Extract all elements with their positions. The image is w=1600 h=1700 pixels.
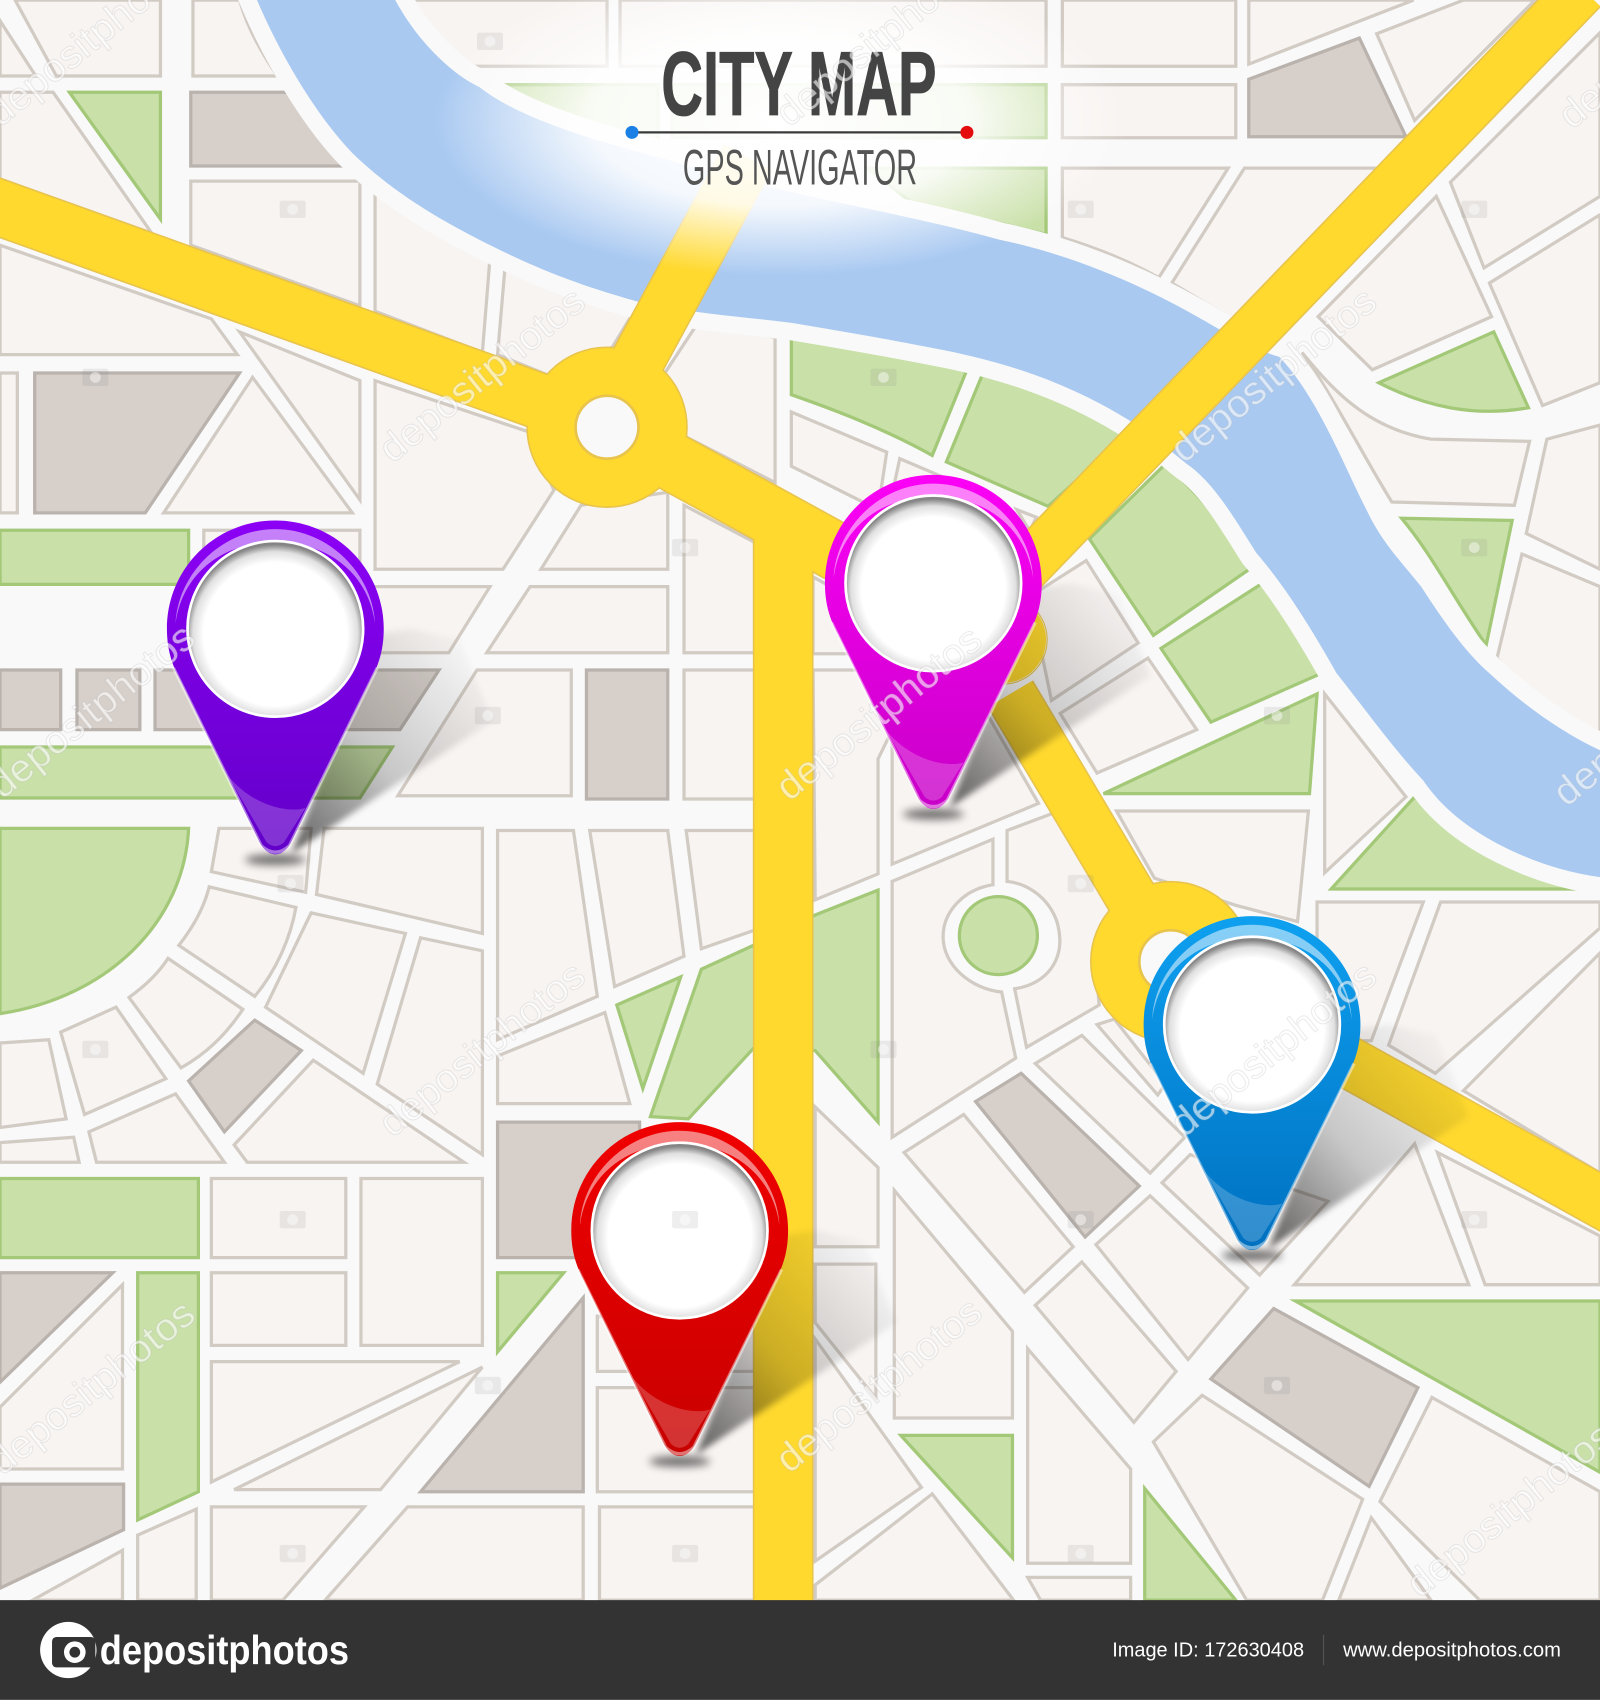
watermark text: depositphotos [1162, 954, 1385, 1145]
footer logo text: depositphotos [100, 1627, 349, 1673]
subtitle: GPS NAVIGATOR [683, 139, 917, 195]
title glow [434, 0, 1127, 277]
roundabout centers [576, 396, 1202, 993]
watermark text: depositphotos [768, 618, 990, 809]
title: CITY MAP [661, 34, 937, 135]
footer separator [1323, 1635, 1325, 1665]
footer image id: Image ID: 172630408 [1112, 1639, 1304, 1662]
pin: red [571, 1122, 896, 1467]
watermark text: depositphotos [371, 954, 594, 1145]
watermark text: depositphotos [768, 1290, 990, 1481]
title divider with dots [625, 126, 973, 139]
footer logo icon [40, 1622, 96, 1678]
watermark text: depositphotos [1162, 279, 1385, 471]
river [255, 0, 1600, 877]
watermark text: depositphotos [371, 279, 594, 471]
watermark camera icons [82, 33, 1487, 1562]
pin: magenta [825, 475, 1150, 820]
footer website: www.depositphotos.com [1342, 1639, 1561, 1662]
pin: blue [1144, 916, 1469, 1261]
footer bar [0, 1600, 1600, 1700]
pin: purple [167, 520, 492, 865]
